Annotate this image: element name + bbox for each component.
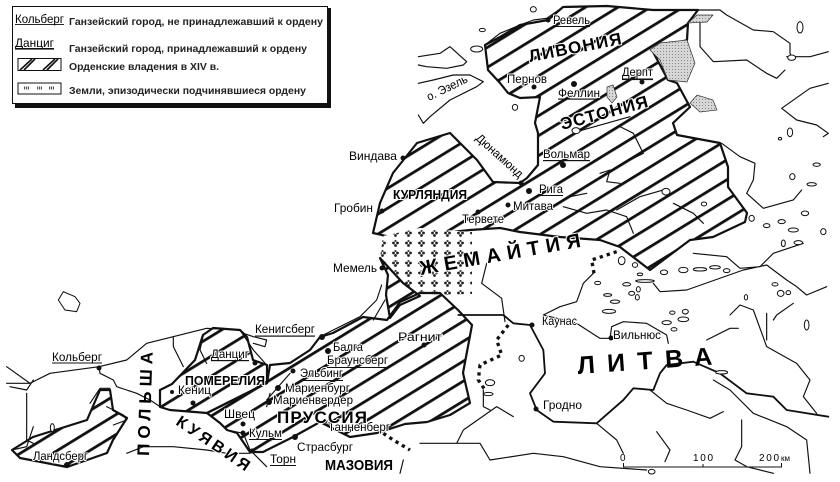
north-east rivers and coast — [418, 7, 828, 235]
legend row: Order lands in the 14th century — [18, 58, 219, 73]
region label: Kujavia: КУЯВИЯ — [173, 413, 253, 475]
lakes with shaded fill — [607, 15, 717, 112]
scale bar: 200 — [759, 453, 779, 464]
region label: Masovia: МАЗОВИЯ — [325, 457, 393, 474]
southern coast, Poland and Pomerania — [7, 285, 403, 473]
eastern and southern rivers — [420, 240, 828, 474]
town labels south-west: Браунсберг — [327, 353, 389, 367]
legend row: Order lands in the 14th century: Орденские владения в XIV в. — [69, 61, 219, 73]
town labels north: о. Эзель — [424, 72, 470, 104]
hatched area: Pomerelia — [160, 328, 267, 413]
town labels north: Дерпт — [622, 65, 653, 79]
region label: Prussia: ПРУССИЯ — [277, 408, 367, 427]
hatched area: Memel strip — [380, 258, 420, 318]
town labels east: Каунас — [542, 314, 577, 328]
region label: Courland: КУРЛЯНДИЯ — [393, 188, 467, 202]
legend row: Hanseatic town in the order — [15, 36, 307, 55]
scale bar: 0 — [620, 453, 626, 464]
town labels south-west: Данциг — [211, 347, 250, 361]
dashed frontier: south — [383, 433, 410, 450]
town labels south-west: Страсбург — [297, 440, 354, 454]
dotted area: Zhemaitia — [380, 228, 472, 295]
town labels south-west — [33, 322, 443, 466]
legend row: lands episodically subject to the Order: Земли, эпизодически подчинявшиеся ордену — [69, 85, 306, 97]
legend row: Hanseatic town in the order: Данциг — [15, 36, 55, 50]
town labels south-west: Мариенбург — [285, 381, 351, 395]
town labels south-west: Мариенвердер — [273, 393, 353, 407]
town dots — [64, 18, 644, 468]
legend panel — [12, 6, 331, 108]
town labels north — [333, 13, 653, 275]
hatched area: Livonia and Estonia — [373, 6, 747, 270]
town labels north: Пернов — [507, 72, 547, 86]
region label: Lithuania: ЛИТВА — [576, 343, 713, 380]
scale bar: км — [781, 454, 790, 463]
town labels south-west: Кениц — [178, 383, 211, 397]
legend row: Hanseatic town outside the order — [15, 12, 323, 28]
legend row: Hanseatic town outside the order: Ганзейский город, не принадлежавший к ордену — [69, 16, 323, 28]
hatched area: Kujavia and Landsberg — [12, 390, 127, 467]
region label: Poland: ПОЛЬША — [134, 352, 157, 456]
town labels south-west: Ландсберг — [33, 449, 89, 463]
region label: Zhemaitia: ЖЕМАЙТИЯ — [417, 228, 582, 280]
dashed frontier: north — [592, 252, 617, 273]
town underlines — [52, 26, 653, 466]
town labels north: Мемель — [333, 261, 377, 275]
town labels south-west: Торн — [270, 452, 296, 466]
town labels north: Рига — [539, 182, 563, 196]
town labels east — [542, 314, 661, 412]
scale bar — [620, 453, 790, 467]
dashed frontier: centre — [478, 325, 508, 390]
region label: Estonia: ЭСТОНИЯ — [558, 92, 650, 134]
town labels south-west: Кольберг — [52, 350, 103, 364]
town labels south-west: Рагнит — [398, 330, 443, 344]
legend box — [12, 6, 328, 104]
town labels south-west: Эльбинг — [300, 366, 344, 380]
town labels north: Митава — [513, 199, 553, 213]
hatched area: Prussia — [207, 293, 472, 452]
town labels east: Вильнюс — [613, 328, 661, 342]
town labels south-west: Кульм — [249, 426, 282, 440]
legend shadow — [15, 8, 331, 108]
town labels north: Виндава — [349, 149, 397, 163]
town labels south-west: Танненберг — [328, 420, 391, 434]
town labels north: Ревель — [553, 13, 590, 27]
town labels south-west: Швец — [224, 407, 255, 421]
town labels north: Гробин — [334, 201, 373, 215]
town labels north: Тервете — [462, 212, 504, 226]
region label: Livonia: ЛИВОНИЯ — [527, 29, 623, 66]
town labels north: Дюнамюнд — [473, 131, 526, 181]
region label: Pomerelia: ПОМЕРЕЛИЯ — [185, 373, 265, 388]
town labels east: Гродно — [543, 398, 582, 412]
legend row: Hanseatic town in the order: Ганзейский город, принадлежавший к ордену — [69, 43, 307, 55]
town labels north: Вольмар — [543, 147, 590, 161]
town labels south-west: Балга — [333, 340, 363, 354]
scale bar: 100 — [693, 453, 713, 464]
town labels south-west: Кенигсберг — [255, 322, 316, 336]
legend row: Hanseatic town outside the order: Кольберг — [15, 12, 65, 26]
town labels north: Феллин — [558, 86, 600, 100]
